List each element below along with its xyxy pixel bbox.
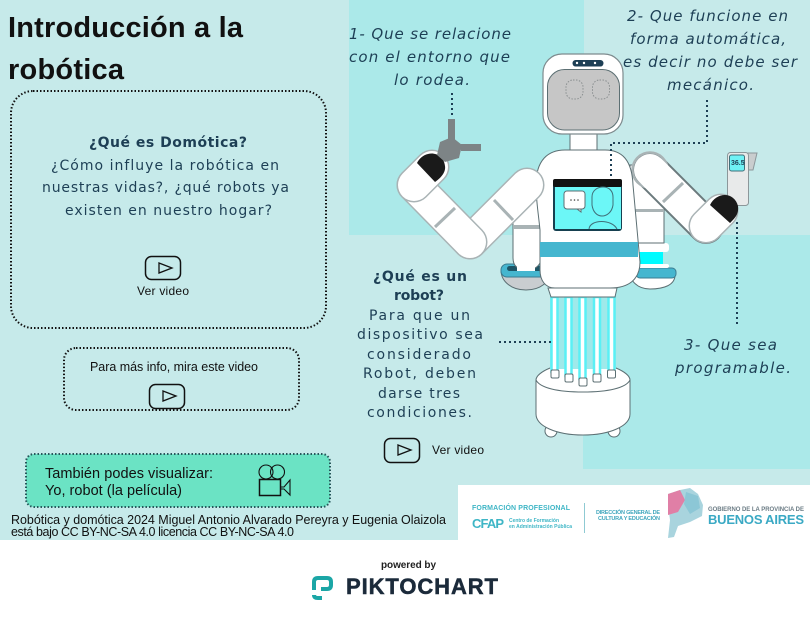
label: Ver video: Ver video xyxy=(432,443,484,457)
logo: CFAP: Centro de Formación xyxy=(509,518,559,524)
panel: más info video xyxy=(64,348,299,410)
text: condition 3 xyxy=(674,336,791,377)
logos strip xyxy=(458,485,810,540)
robot body xyxy=(536,130,640,297)
text: condition 1: 1- Que se relacione xyxy=(349,25,511,43)
logo: Buenos Aires map xyxy=(668,488,703,538)
logo: Dirección General: DIRECCIÓN GENERAL DE xyxy=(596,508,660,516)
gripper xyxy=(437,119,481,162)
right side tray xyxy=(630,165,676,289)
right arm xyxy=(632,152,721,226)
text block: ¿Qué es un robot?: Robot, deben xyxy=(363,366,476,382)
powered by Piktochart xyxy=(314,560,499,599)
logo: CFAP: CFAP xyxy=(472,516,504,531)
logo: CFAP: FORMACIÓN PROFESIONAL xyxy=(472,503,571,512)
text: También podes visualizar xyxy=(45,466,213,499)
license text: Robótica y domótica 2024 Miguel Antonio Alvarado Pereyra y Eugenia Olaizola xyxy=(11,513,446,527)
illustration: robot xyxy=(414,54,757,437)
thermometer xyxy=(728,152,757,206)
text: condition 2: forma automática, xyxy=(630,30,786,48)
icon: play video xyxy=(150,384,184,408)
logo: CFAP xyxy=(472,503,572,531)
dotted connector: condition 3 xyxy=(736,222,738,327)
robot head xyxy=(543,54,623,134)
text block: ¿Qué es un robot?: dispositivo sea xyxy=(357,327,483,343)
panel: película xyxy=(26,454,330,507)
logo: CFAP: en Administración Pública xyxy=(509,524,572,530)
text: condition 1 xyxy=(349,25,511,89)
text: También podes visualizar: Yo, robot (la película) xyxy=(45,483,182,499)
text block: ¿Qué es un robot?: Para que un xyxy=(369,308,470,324)
text: condition 2: es decir no debe ser xyxy=(623,53,798,71)
text block: domótica description xyxy=(42,158,289,219)
text: condition 1: con el entorno que xyxy=(349,48,510,66)
dotted connector: condition 2 xyxy=(611,100,707,176)
text: condition 3: 3- Que sea xyxy=(684,336,777,354)
panel: condition 1 background xyxy=(349,0,584,235)
text: condition 2: mecánico. xyxy=(667,76,754,94)
title: robótica xyxy=(8,54,125,86)
panel: ¿Qué es Domótica? xyxy=(11,91,326,328)
logo: Dirección General: CULTURA Y EDUCACIÓN xyxy=(598,514,660,522)
logo: Gobierno Buenos Aires: BUENOS AIRES xyxy=(708,512,804,527)
robot tubes xyxy=(550,297,616,386)
title xyxy=(8,12,244,86)
text: condition 1: lo rodea. xyxy=(394,71,470,89)
title: Introducción a la xyxy=(8,12,244,44)
text block: ¿Qué es un robot?: ¿Qué es un xyxy=(373,269,467,285)
thermometer: 36.5 xyxy=(731,160,745,167)
robot chest screen xyxy=(553,179,622,231)
text: powered by: powered by xyxy=(381,560,436,571)
license text: está bajo CC BY-NC-SA 4.0 licencia CC BY-NC-SA 4.0 xyxy=(11,525,294,539)
text block: domótica description: existen en nuestro hogar? xyxy=(65,203,272,219)
logo: Dirección General xyxy=(596,508,660,522)
heading: ¿Qué es Domótica?: ¿Qué es Domótica? xyxy=(89,135,247,151)
logo: Gobierno Buenos Aires: GOBIERNO DE LA PROVINCIA DE xyxy=(708,507,804,513)
text block: ¿Qué es un robot?: considerado xyxy=(367,347,471,363)
left arm xyxy=(414,154,527,242)
text block: ¿Qué es un robot?: darse tres xyxy=(378,386,460,402)
dotted connector: robot definition xyxy=(499,341,552,343)
text: condition 3: programable. xyxy=(674,359,791,377)
text block: ¿Qué es un robot?: condiciones. xyxy=(367,405,472,421)
dotted connector: condition 1 xyxy=(451,93,453,118)
license text xyxy=(11,513,446,539)
left lower arm xyxy=(513,200,541,271)
text: Para más info: Para más info, mira este video xyxy=(90,360,258,374)
text: condition 2: 2- Que funcione en xyxy=(627,7,788,25)
text block: ¿Qué es un robot? xyxy=(357,269,483,421)
wordmark: Piktochart: PIKTOCHART xyxy=(346,574,499,599)
left side tray xyxy=(501,264,551,290)
text: condition 2 xyxy=(623,7,798,94)
icon: play video xyxy=(146,256,180,280)
icon: play video xyxy=(384,438,420,462)
text block: domótica description: nuestras vidas?, ¿qué robots ya xyxy=(42,180,289,196)
icon: Piktochart logo xyxy=(314,578,331,598)
right hand cap xyxy=(710,195,738,223)
text: También podes visualizar: También podes visualizar: xyxy=(45,466,213,482)
robot base xyxy=(536,362,630,437)
label: Ver video: Ver video xyxy=(137,284,189,298)
text block: ¿Qué es un robot?: robot? xyxy=(394,288,444,304)
panel: condition 3 background xyxy=(583,235,810,469)
text block: domótica description: ¿Cómo influye la robótica en xyxy=(51,158,279,174)
icon: film camera xyxy=(259,465,290,496)
